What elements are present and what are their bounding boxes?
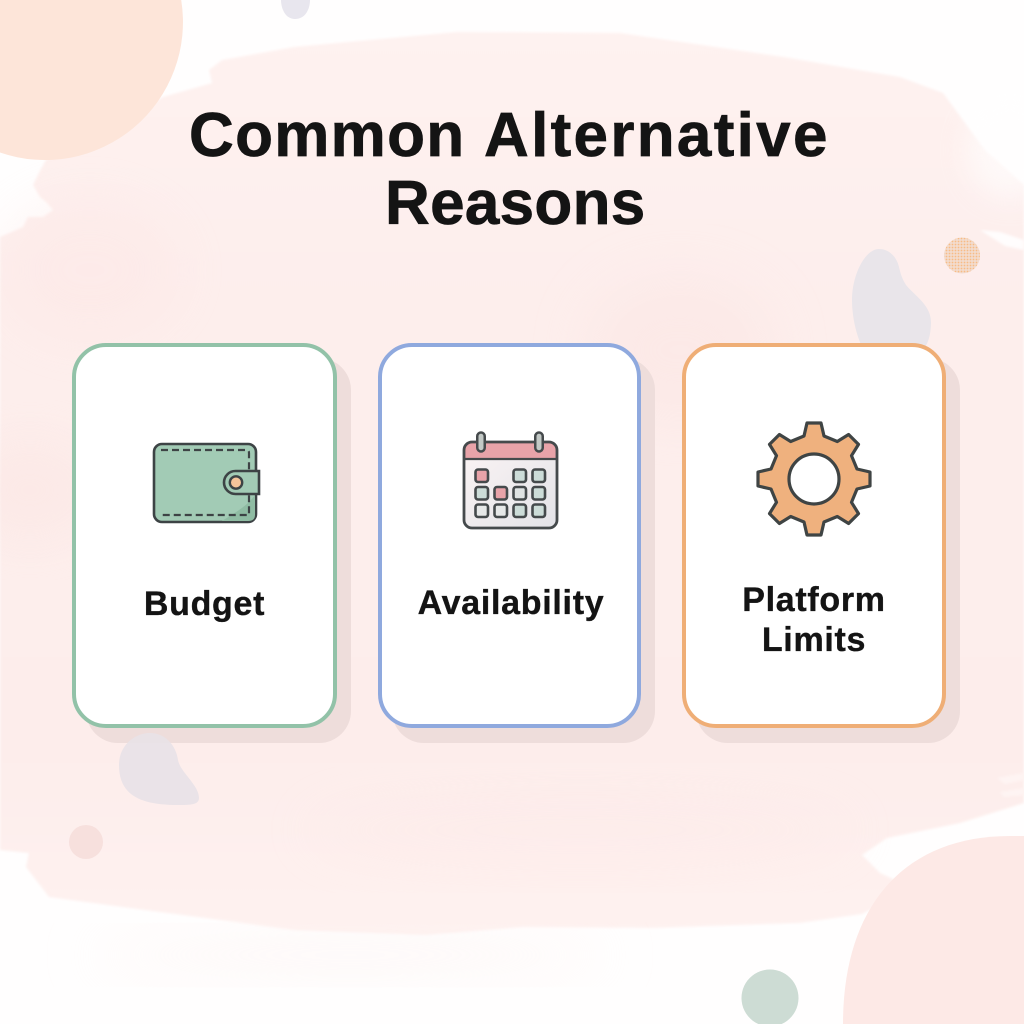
title: Alternative bbox=[484, 101, 830, 170]
title bbox=[189, 101, 830, 238]
panel: availability bbox=[378, 343, 655, 743]
label: budget: Budget bbox=[144, 585, 265, 623]
label: platform limits: Platform bbox=[742, 581, 886, 619]
green dot bottom bbox=[742, 970, 798, 1024]
lavender blob lower left bbox=[119, 733, 199, 805]
label: platform limits: Limits bbox=[762, 621, 866, 659]
label: platform limits bbox=[742, 581, 886, 659]
icon: gear bbox=[756, 421, 872, 537]
pink circle bottom right bbox=[843, 836, 1024, 1024]
label: availability: Availability bbox=[418, 584, 604, 622]
icon: wallet bbox=[152, 442, 260, 524]
title: Common bbox=[189, 101, 465, 170]
panel: budget bbox=[72, 343, 351, 743]
panel: platform limits bbox=[682, 343, 960, 743]
pink dot lower left bbox=[69, 825, 103, 859]
peach circle top left bbox=[0, 0, 183, 160]
lavender blob top bbox=[281, 0, 310, 19]
icon: calendar bbox=[462, 431, 558, 530]
title: Reasons bbox=[385, 169, 646, 238]
orange dot right bbox=[944, 238, 980, 274]
lavender blob right bbox=[852, 249, 931, 360]
